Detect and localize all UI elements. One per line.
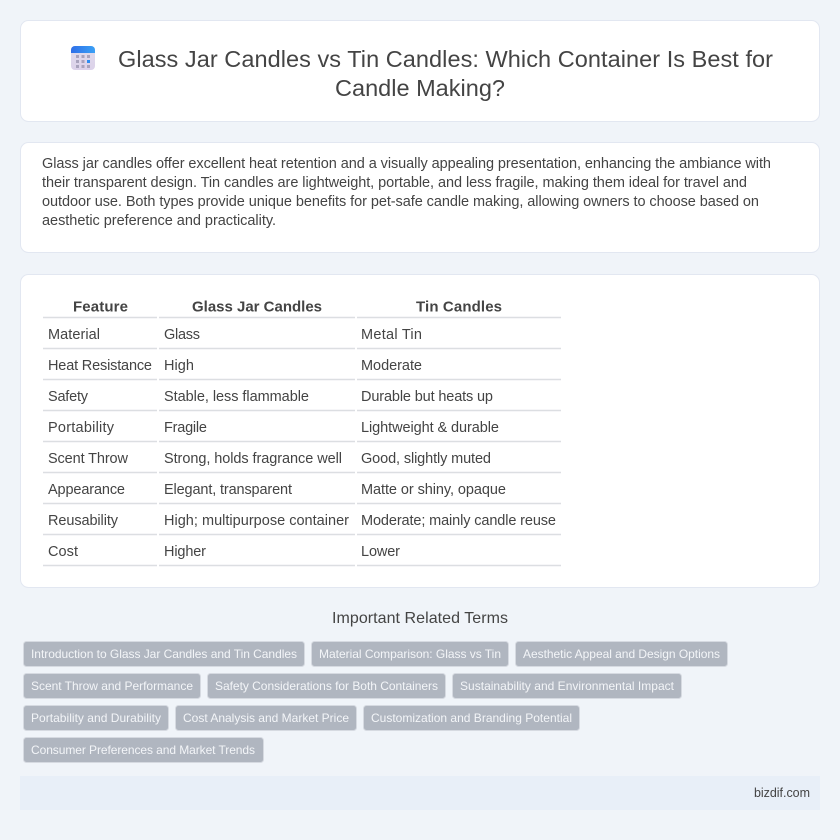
intro text bbox=[42, 156, 771, 229]
row: portability: Fragile bbox=[164, 420, 207, 436]
tag bbox=[24, 706, 168, 730]
row: scent throw: Good, slightly muted bbox=[361, 451, 491, 467]
row: material: Glass bbox=[164, 327, 200, 343]
row: cost: Lower bbox=[361, 544, 400, 560]
tag bbox=[364, 706, 580, 730]
row: cost: Higher bbox=[164, 544, 206, 560]
tag: Customization and Branding Potential bbox=[371, 711, 572, 725]
row: material bbox=[48, 327, 422, 343]
panel: header bbox=[20, 20, 820, 122]
row: scent throw: Scent Throw bbox=[48, 451, 129, 467]
tag bbox=[208, 674, 446, 698]
tag: Introduction to Glass Jar Candles and Tin Candles bbox=[31, 647, 297, 661]
row: material: Material bbox=[48, 327, 100, 343]
tag: Aesthetic Appeal and Design Options bbox=[523, 647, 720, 661]
row: scent throw: Strong, holds fragrance well bbox=[164, 451, 342, 467]
panel: comparison table bbox=[20, 274, 820, 588]
row: safety bbox=[48, 389, 493, 405]
intro text: outdoor use. Both types provide unique benefits for pet-safe candle making, allowing owners to choose based on bbox=[42, 194, 759, 210]
row: heat resistance bbox=[48, 358, 422, 374]
row: heat resistance: Heat Resistance bbox=[48, 358, 152, 374]
heading: important related terms: Important Related Terms bbox=[332, 610, 508, 627]
row: safety: Safety bbox=[48, 389, 89, 405]
title: Glass Jar Candles vs Tin Candles: Which Container Is Best for bbox=[118, 46, 773, 72]
tag bbox=[24, 674, 200, 698]
tag: Portability and Durability bbox=[31, 711, 161, 725]
row: heat resistance: High bbox=[164, 358, 194, 374]
title: Candle Making? bbox=[335, 75, 505, 101]
tag: Consumer Preferences and Market Trends bbox=[31, 743, 255, 757]
table header bbox=[73, 298, 502, 316]
row: cost bbox=[48, 544, 400, 560]
tag: Cost Analysis and Market Price bbox=[183, 711, 349, 725]
tag bbox=[24, 738, 264, 762]
tag bbox=[516, 642, 728, 666]
row: portability: Portability bbox=[48, 420, 115, 436]
tag: Sustainability and Environmental Impact bbox=[460, 679, 675, 693]
row: reusability bbox=[48, 513, 556, 529]
row: portability bbox=[48, 420, 499, 436]
footer: bizdif.com bbox=[754, 786, 810, 800]
row: safety: Durable but heats up bbox=[361, 389, 493, 405]
tag: Material Comparison: Glass vs Tin bbox=[319, 647, 501, 661]
panel: introduction bbox=[20, 142, 820, 252]
row: scent throw bbox=[48, 451, 491, 467]
icon: calendar bbox=[71, 46, 95, 70]
row: portability: Lightweight & durable bbox=[361, 420, 499, 436]
row: appearance: Elegant, transparent bbox=[164, 482, 292, 498]
row: safety: Stable, less flammable bbox=[164, 389, 309, 405]
footer bbox=[20, 776, 820, 810]
title bbox=[118, 46, 773, 101]
row: reusability: Reusability bbox=[48, 513, 119, 529]
tag: Scent Throw and Performance bbox=[31, 679, 193, 693]
row: cost: Cost bbox=[48, 544, 78, 560]
tag: Safety Considerations for Both Containers bbox=[215, 679, 438, 693]
table header: Glass Jar Candles bbox=[192, 298, 322, 316]
table header: Feature bbox=[73, 298, 128, 316]
intro text: their transparent design. Tin candles are lightweight, portable, and less fragile, making them ideal for travel and bbox=[42, 175, 747, 191]
intro text: aesthetic preference and practicality. bbox=[42, 213, 276, 229]
tag bbox=[452, 674, 682, 698]
row: reusability: Moderate; mainly candle reuse bbox=[361, 513, 556, 529]
row: appearance: Appearance bbox=[48, 482, 125, 498]
row: appearance bbox=[48, 482, 506, 498]
row: appearance: Matte or shiny, opaque bbox=[361, 482, 506, 498]
tag bbox=[24, 642, 304, 666]
intro text: Glass jar candles offer excellent heat retention and a visually appealing presentation, enhancing the ambiance with bbox=[42, 156, 771, 172]
row: heat resistance: Moderate bbox=[361, 358, 422, 374]
tag bbox=[312, 642, 508, 666]
row: material: Metal Tin bbox=[361, 327, 422, 343]
row: reusability: High; multipurpose container bbox=[164, 513, 349, 529]
tag bbox=[176, 706, 356, 730]
tags: related terms bbox=[24, 642, 728, 762]
table header: Tin Candles bbox=[416, 298, 502, 316]
